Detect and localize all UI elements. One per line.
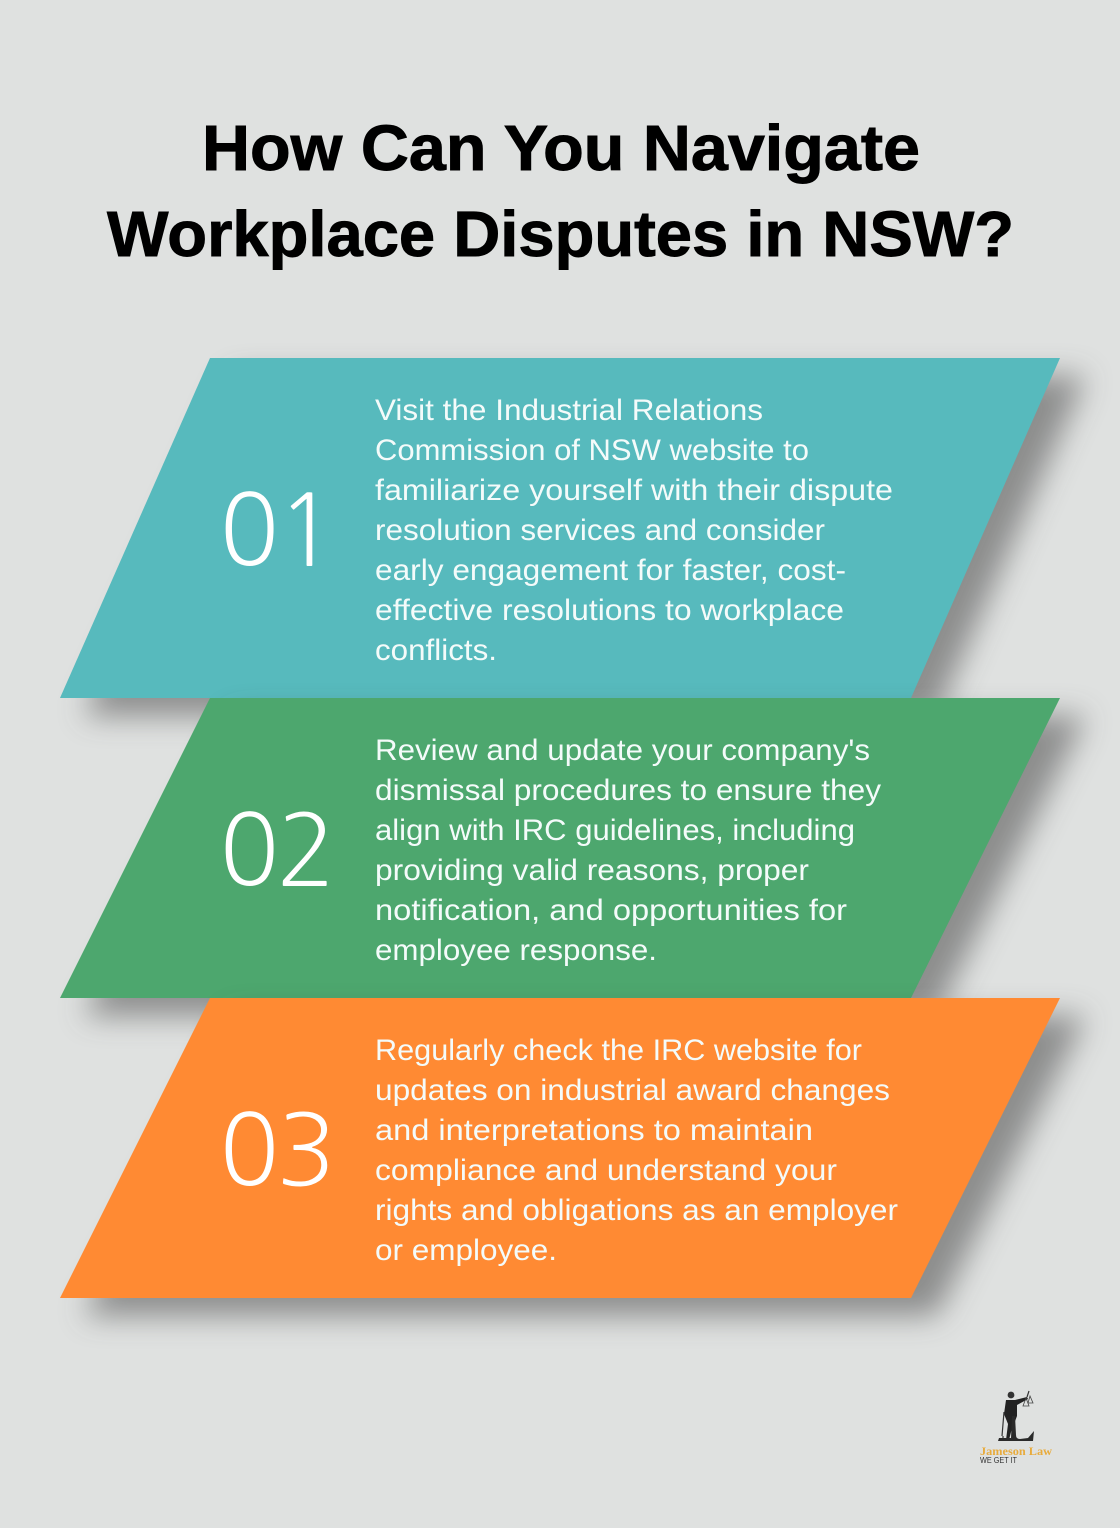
panel: step 02 bbox=[60, 698, 1086, 1016]
text: step 02 body: align with IRC guidelines, including bbox=[375, 814, 855, 847]
panel: step 03 bbox=[60, 998, 1086, 1316]
title: How Can You Navigate bbox=[202, 112, 920, 184]
logo: Jameson Law bbox=[980, 1391, 1053, 1465]
text: step 01 body bbox=[375, 394, 893, 667]
title: Workplace Disputes in NSW? bbox=[107, 198, 1014, 270]
text: tagline: WE GET IT bbox=[980, 1456, 1017, 1465]
text: step 03 body bbox=[375, 1034, 898, 1267]
panel: step 01 bbox=[60, 358, 1086, 716]
text: step 01 body: Commission of NSW website to bbox=[375, 434, 809, 467]
number 03: 03 bbox=[219, 1101, 337, 1201]
title bbox=[107, 112, 1014, 270]
text: step 03 body: and interpretations to maintain bbox=[375, 1114, 813, 1147]
icon: lady justice bbox=[998, 1391, 1034, 1441]
text: step 01 body: Visit the Industrial Relations bbox=[375, 394, 763, 427]
text: step 02 body bbox=[375, 734, 881, 967]
text: step 01 body: conflicts. bbox=[375, 634, 497, 667]
text: step 03 body: updates on industrial award changes bbox=[375, 1074, 890, 1107]
text: step 02 body: dismissal procedures to ensure they bbox=[375, 774, 881, 807]
text: step 03 body: compliance and understand your bbox=[375, 1154, 837, 1187]
text: step 02 body: Review and update your company's bbox=[375, 734, 870, 767]
text: step 01 body: resolution services and consider bbox=[375, 514, 825, 547]
text: step 03 body: rights and obligations as an employer bbox=[375, 1194, 898, 1227]
text: step 03 body: Regularly check the IRC website for bbox=[375, 1034, 862, 1067]
text: step 01 body: effective resolutions to workplace bbox=[375, 594, 844, 627]
number 02: 02 bbox=[219, 801, 337, 901]
number 01: 01 bbox=[219, 481, 337, 581]
text: step 02 body: employee response. bbox=[375, 934, 657, 967]
text: step 02 body: providing valid reasons, proper bbox=[375, 854, 809, 887]
text: brand name: Jameson Law bbox=[980, 1446, 1053, 1458]
text: step 02 body: notification, and opportunities for bbox=[375, 894, 847, 927]
text: step 01 body: familiarize yourself with their dispute bbox=[375, 474, 893, 507]
text: step 01 body: early engagement for faster, cost- bbox=[375, 554, 846, 587]
text: step 03 body: or employee. bbox=[375, 1234, 557, 1267]
